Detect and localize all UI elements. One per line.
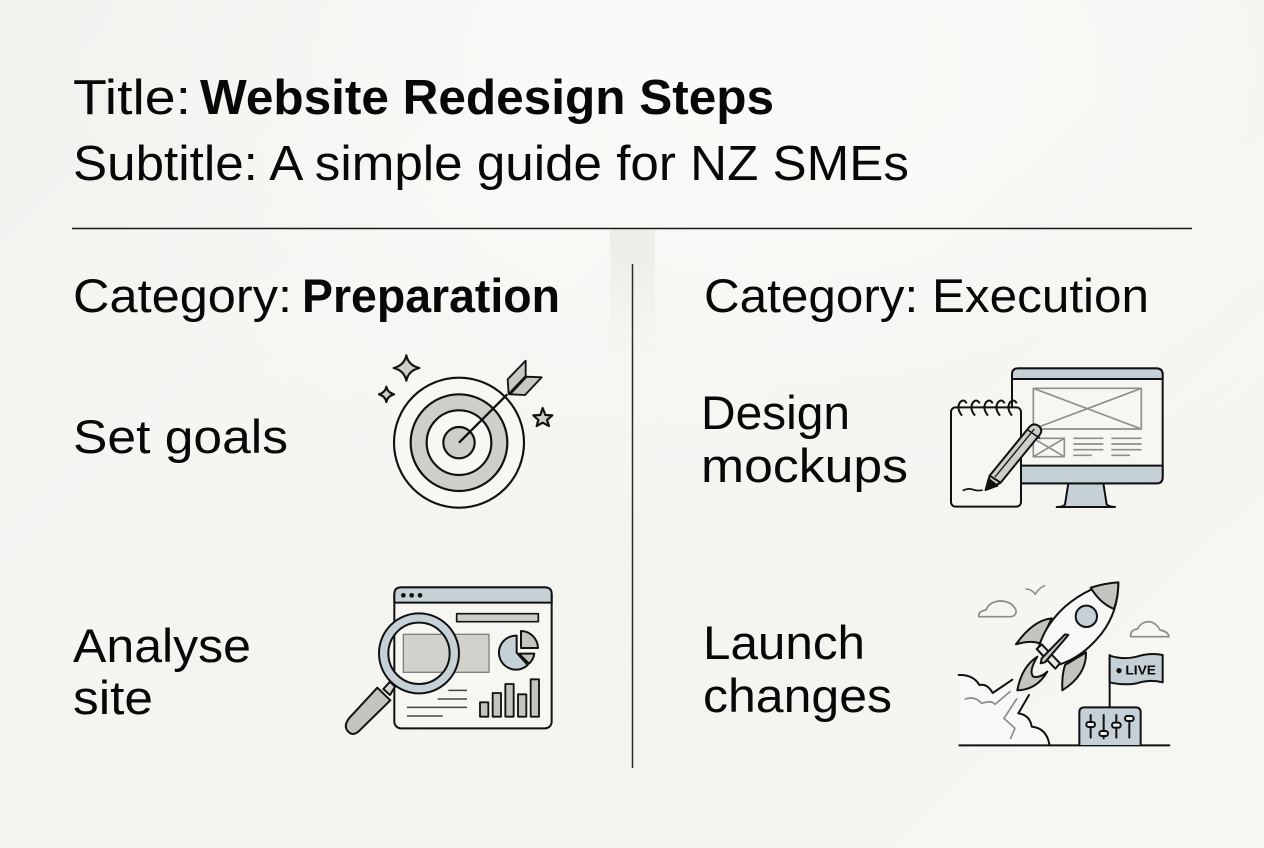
label: launch changes bbox=[703, 616, 892, 722]
icon: rocket launch bbox=[959, 582, 1169, 745]
label: design mockups: mockups bbox=[701, 439, 908, 492]
label: set goals: Set goals bbox=[73, 410, 288, 463]
subtitle: Subtitle: A simple guide for NZ SMEs bbox=[73, 137, 909, 191]
icon: rocket launch: LIVE bbox=[1125, 664, 1156, 678]
panel: preparation bbox=[73, 269, 560, 734]
title: Title: bbox=[73, 71, 191, 125]
icon: target with arrow bbox=[379, 355, 552, 508]
label: design mockups: Design bbox=[701, 386, 850, 439]
label: analyse site bbox=[73, 619, 251, 724]
label: analyse site: Analyse bbox=[73, 619, 251, 672]
heading: execution: Category: Execution bbox=[704, 269, 1149, 322]
divider between categories bbox=[632, 264, 634, 768]
title: Website Redesign Steps bbox=[200, 71, 774, 125]
icon: browser with magnifier bbox=[346, 587, 552, 734]
heading: preparation: Category: bbox=[73, 269, 292, 322]
label: launch changes: Launch bbox=[703, 616, 865, 669]
label: launch changes: changes bbox=[703, 669, 892, 722]
icon: notepad and monitor bbox=[951, 368, 1163, 507]
heading: preparation bbox=[73, 269, 560, 322]
label: analyse site: site bbox=[73, 671, 153, 724]
panel: execution bbox=[701, 269, 1169, 745]
heading: preparation: Preparation bbox=[302, 269, 560, 322]
label: design mockups bbox=[701, 386, 908, 492]
